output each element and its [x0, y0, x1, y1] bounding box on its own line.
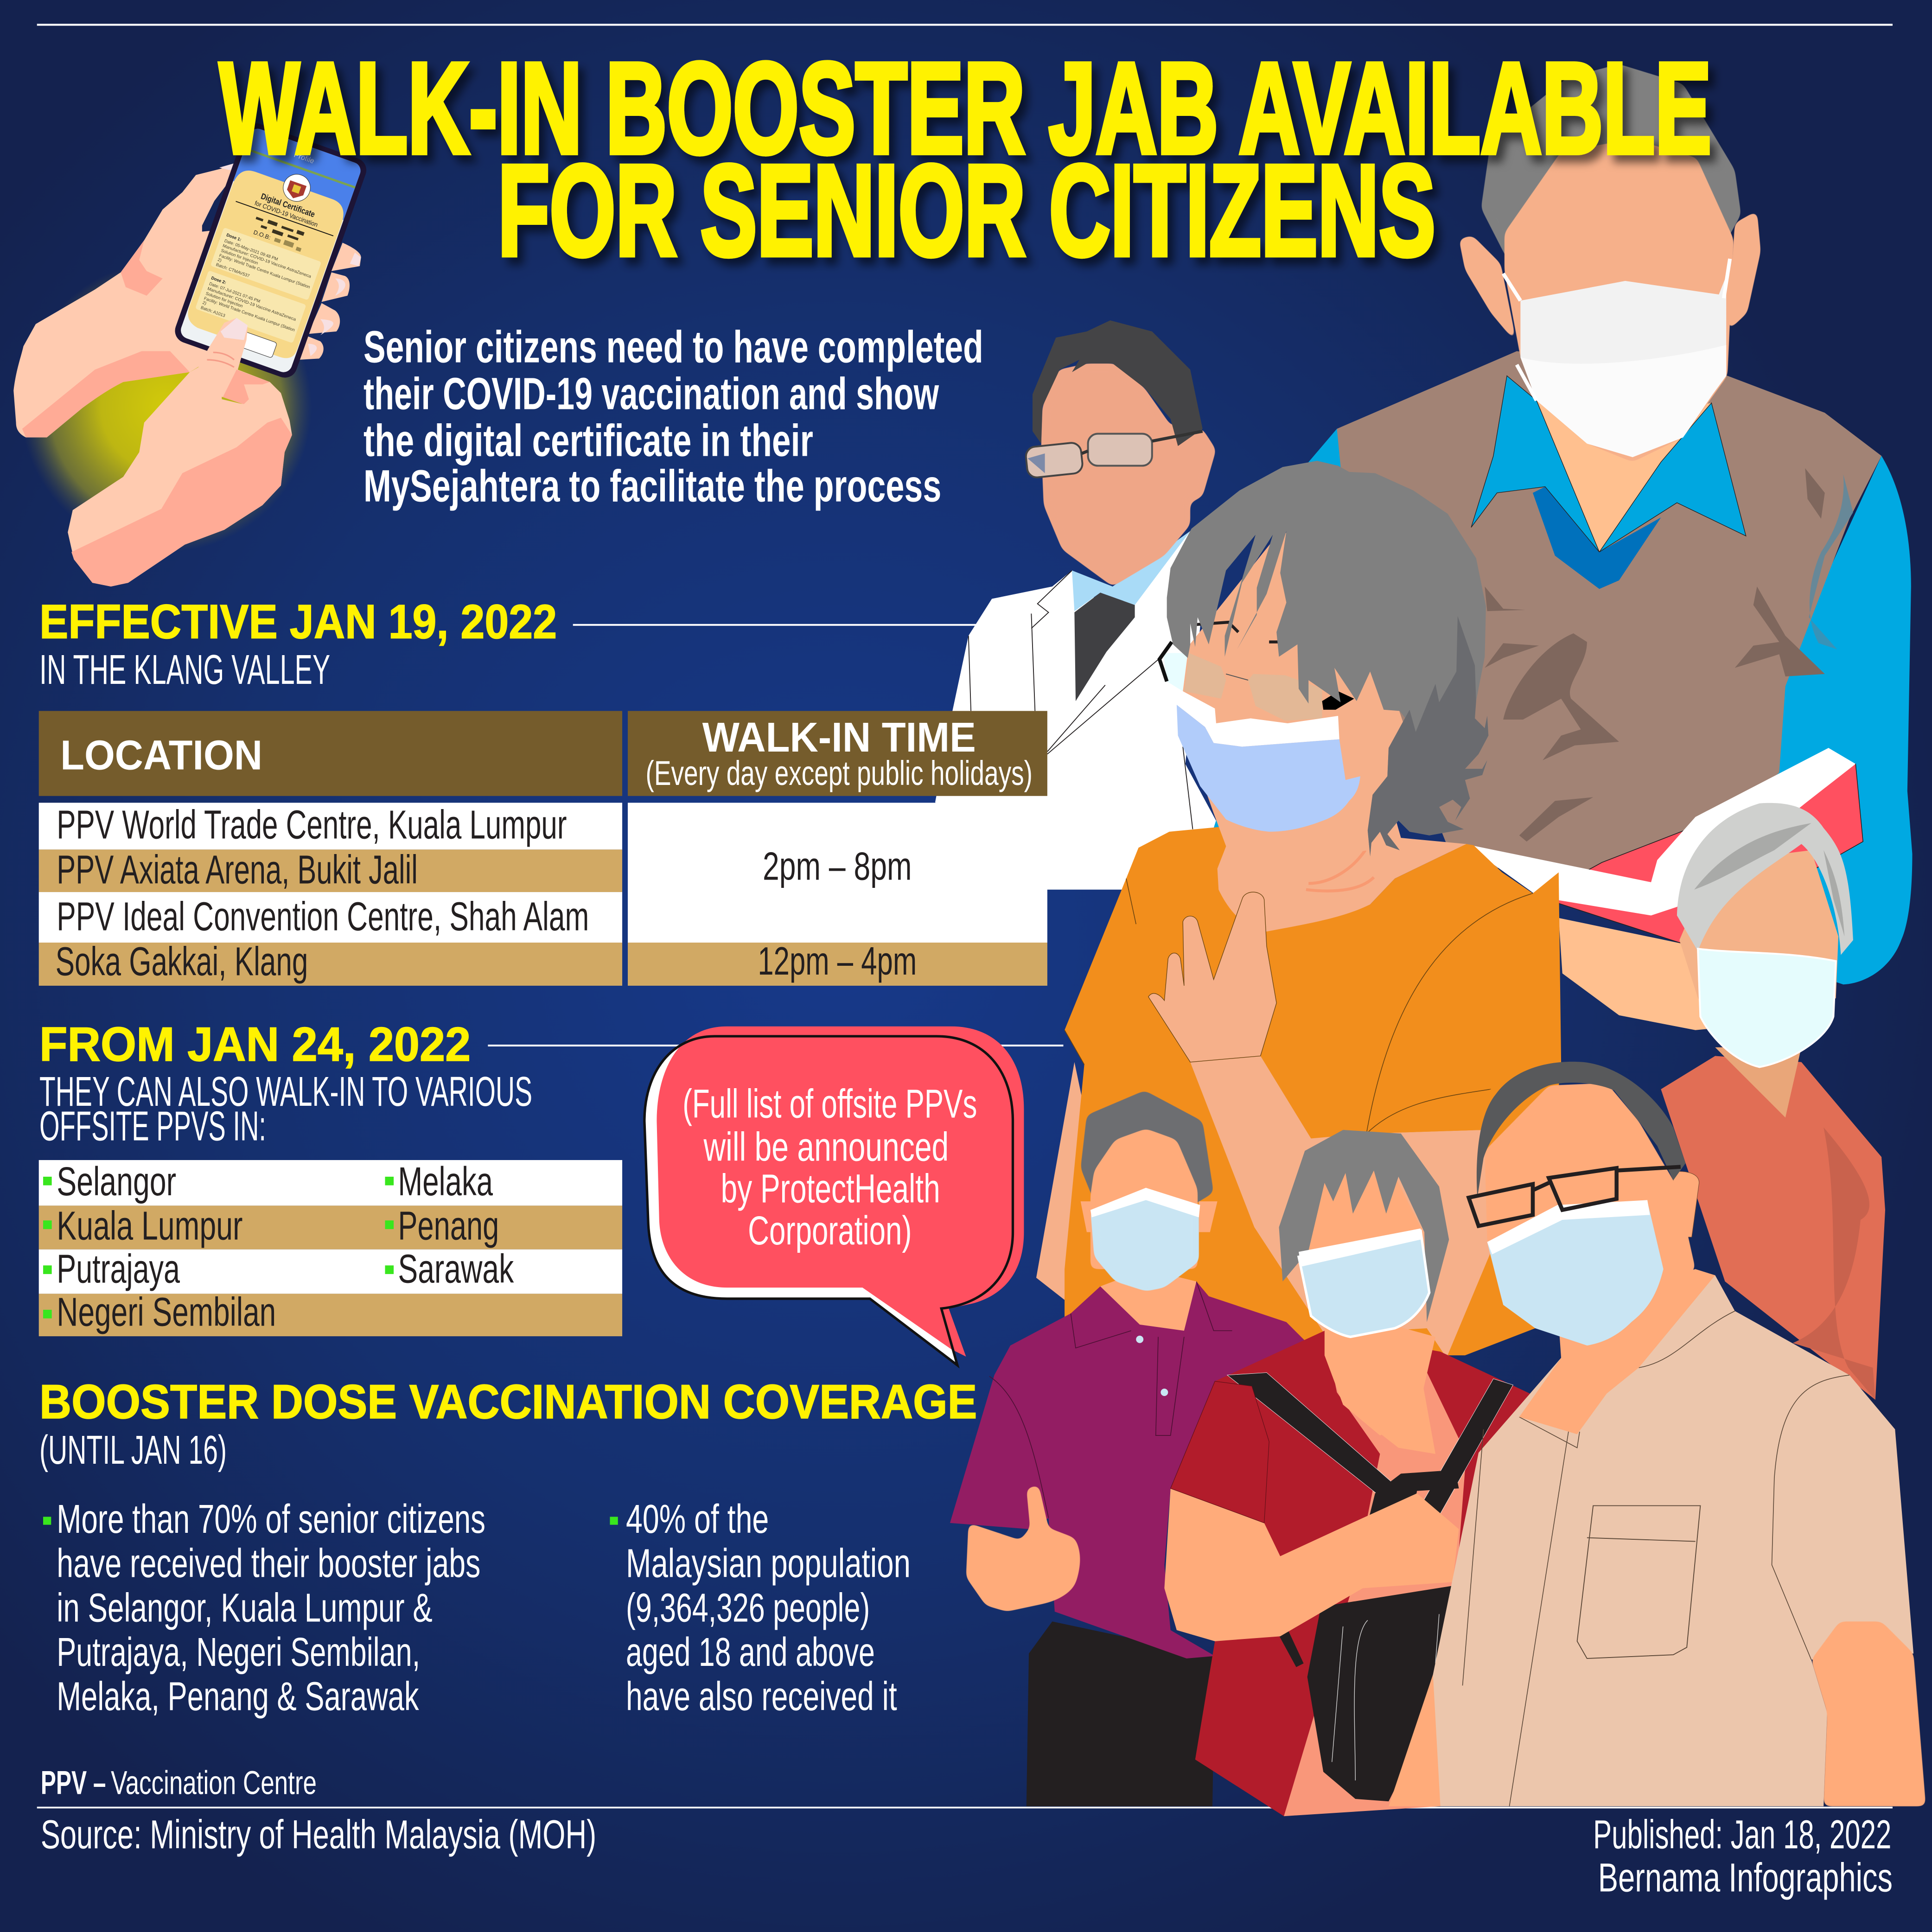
inner shirt: [1533, 487, 1661, 589]
certificate subtitle: for COVID-19 Vaccination: [254, 199, 319, 228]
row text: [56, 802, 917, 984]
hair: [1081, 1090, 1214, 1207]
hair: [1477, 1062, 1685, 1198]
glasses: [1160, 622, 1354, 721]
subheading: offsite PPVs: OFFSITE PPVS IN:: [39, 1103, 266, 1150]
fingers behind phone: [298, 243, 361, 360]
bubble text: will be announced: [703, 1124, 949, 1169]
dose 1 details: Date: 05-May-2021 09:48 PM: [224, 238, 279, 261]
footnote: PPV definition: [41, 1764, 317, 1801]
illustration: woman in orange shirt: [1036, 461, 1561, 1358]
mask band: [1299, 1229, 1421, 1267]
ears: [1081, 1201, 1218, 1232]
state names: Sarawak: [398, 1246, 514, 1291]
coverage note: population: [610, 1496, 911, 1719]
coverage note: senior citizens: Melaka, Penang & Sarawak: [57, 1674, 419, 1719]
shirt: [1661, 1056, 1885, 1400]
finger creases: [207, 352, 234, 367]
profile label: Profile: [293, 151, 315, 166]
intro paragraph: MySejahtera to facilitate the process: [363, 461, 941, 511]
emblem: [280, 171, 314, 205]
coverage note: population: have also received it: [626, 1674, 897, 1719]
right arm: [1190, 1056, 1491, 1358]
fingernails: [308, 253, 361, 356]
intro paragraph: [363, 321, 983, 511]
straps: [1227, 1372, 1513, 1527]
left forearm: [1389, 1675, 1462, 1806]
coverage note: senior citizens: in Selangor, Kuala Lumpur &: [57, 1585, 433, 1630]
illustration: woman in red jacket: [1164, 1130, 1535, 1816]
arm: [1559, 912, 1774, 1030]
table: walk-in locations and times: [39, 711, 1047, 986]
hair: [1481, 64, 1741, 259]
mask band: [1177, 691, 1339, 746]
coverage note: population: Malaysian population: [626, 1541, 911, 1586]
glasses: [1469, 1167, 1681, 1226]
pocket: [1577, 1505, 1700, 1658]
neck: [1537, 401, 1711, 552]
lower strap: [1274, 1626, 1304, 1667]
mask band: [1487, 1200, 1650, 1254]
mask: [1090, 1190, 1199, 1291]
pixelated name: [253, 216, 305, 243]
coverage note: population: aged 18 and above: [626, 1629, 875, 1675]
tie: [1074, 593, 1135, 701]
header: walk-in time: [628, 711, 1047, 796]
outline: [644, 1036, 1013, 1365]
glow: [21, 261, 312, 552]
sleeve: [1311, 1089, 1491, 1139]
title: [219, 36, 1711, 283]
shirt: [950, 1282, 1305, 1658]
face: [1679, 850, 1838, 1059]
callout: speech bubble: [644, 1027, 1024, 1365]
coverage note: senior citizens: [43, 1496, 485, 1719]
lower hand: [68, 318, 292, 587]
hand: [1148, 892, 1276, 1062]
lapel lines: [969, 570, 1192, 829]
dose 1 details: Solution for Injection: [220, 248, 259, 266]
state names: Melaka: [398, 1159, 493, 1204]
neck: [1715, 1047, 1801, 1117]
dose 2 details: Date: 07-Jul-2021 07:45 PM: [209, 281, 261, 304]
book pages: [1465, 748, 1855, 916]
sleeve: [1171, 1381, 1269, 1523]
row text: Soka Gakkai, Klang: [56, 938, 308, 984]
table: offsite states: [39, 1159, 622, 1336]
heading: effective date: EFFECTIVE JAN 19, 2022: [39, 595, 557, 649]
dose 2 details: Batch: A1013: [200, 305, 226, 318]
subheading: offsite PPVs: THEY CAN ALSO WALK-IN TO VARIOUS: [39, 1068, 532, 1115]
bubble text: [682, 1081, 977, 1253]
mask lower fold: [1520, 345, 1726, 457]
mask: [1698, 949, 1836, 1067]
row text: PPV World Trade Centre, Kuala Lumpur: [57, 802, 567, 847]
top rule: [37, 24, 1893, 26]
footnote: PPV definition: PPV –: [41, 1764, 106, 1801]
shirt shading: [1793, 1128, 1875, 1400]
mask: [1520, 276, 1726, 457]
buttons: [1136, 1336, 1168, 1396]
dose 2 details: Manufacturer: COVID-19 Vaccine AstraZeneca: [207, 286, 297, 322]
jacket: [1171, 1331, 1535, 1816]
dose 1 details: Facility: World Trade Centre Kuala Lumpur (Station: [218, 253, 311, 289]
row text: 2pm – 8pm: [763, 844, 912, 888]
download button: [228, 327, 277, 358]
shirt seams: [1462, 1311, 1849, 1806]
upper hand shading: [22, 240, 190, 437]
face: [1306, 1164, 1423, 1337]
walk-in time header text: WALK-IN TIME: [702, 714, 976, 761]
neck and chest: [1218, 764, 1466, 931]
placket and sleeve seams: [989, 1282, 1232, 1518]
right sleeve: [1700, 456, 1912, 984]
dose 1 details: Manufacturer: COVID-19 Vaccine AstraZeneca: [222, 243, 312, 279]
walk-in time note: (Every day except public holidays): [646, 754, 1033, 792]
fingernail: [221, 318, 248, 340]
location header text: LOCATION: [60, 732, 262, 779]
phone: [172, 120, 370, 381]
row text: PPV Ideal Convention Centre, Shah Alam: [57, 893, 589, 939]
vest: [1337, 351, 1881, 887]
bubble text: by ProtectHealth: [721, 1166, 940, 1211]
neck creases: [1274, 801, 1374, 891]
subheading: until date: (UNTIL JAN 16): [39, 1427, 227, 1473]
intro paragraph: their COVID-19 vaccination and show: [363, 368, 939, 419]
section rule: from: [488, 1045, 1063, 1046]
upper chest: [1325, 1331, 1435, 1454]
shirt: [1065, 826, 1561, 1355]
state names: Selangor: [57, 1159, 176, 1204]
bag handle: [1369, 1470, 1459, 1528]
hair strands: [1694, 823, 1844, 937]
location rows: [39, 803, 622, 986]
hair: [1677, 803, 1853, 955]
mask: [1299, 1231, 1429, 1337]
arm and thumbs up: [966, 1485, 1080, 1612]
dose 1 details: 2): [217, 257, 222, 263]
header: location: [39, 711, 622, 796]
hair: [1279, 1130, 1449, 1322]
dose 1 details: Dose 1:: [226, 232, 242, 242]
lower hair: [1368, 616, 1488, 856]
intro paragraph: the digital certificate in their: [363, 415, 813, 465]
chest: [1284, 1331, 1466, 1816]
subheading: Klang Valley: IN THE KLANG VALLEY: [39, 646, 330, 693]
bottom rule: [37, 1807, 1893, 1808]
lower hand shading: [71, 370, 292, 587]
section rule: effective: [573, 624, 980, 626]
left shoulder sleeve: [1214, 429, 1355, 828]
state names: Kuala Lumpur: [57, 1203, 243, 1248]
dose 2 details: 2): [202, 300, 207, 306]
bubble text: (Full list of offsite PPVs: [682, 1081, 977, 1126]
shirt: [1433, 1275, 1913, 1806]
publication info: [1593, 1811, 1893, 1900]
coverage note: population: (9,364,326 people): [626, 1585, 870, 1630]
coverage note: population: 40% of the: [626, 1496, 769, 1542]
orange below arm: [1183, 1232, 1331, 1355]
dose 2 details: Facility: World Trade Centre Kuala Lumpur (Station: [204, 296, 295, 332]
bullets: [43, 1177, 394, 1319]
vest pattern: [1485, 468, 1853, 842]
illustration: man in purple shirt: [950, 1090, 1305, 1806]
face: [1090, 1129, 1198, 1269]
bag: [1307, 1586, 1453, 1801]
mask band: [1090, 1188, 1200, 1218]
illustration: doctor: [935, 320, 1218, 890]
shirt: [1072, 531, 1190, 611]
bubble text: Corporation): [748, 1208, 912, 1253]
white backing: [644, 1036, 1013, 1365]
ear: [1673, 1172, 1699, 1237]
neck: [1325, 1306, 1435, 1435]
title line 2: FOR SENIOR CITIZENS: [498, 138, 1435, 283]
right arm: [1811, 1621, 1926, 1806]
state names: Negeri Sembilan: [57, 1289, 276, 1334]
mask: [1487, 1201, 1664, 1345]
state names: Penang: [398, 1203, 499, 1248]
illustration: senior man with vest: [1214, 64, 1912, 1030]
dose 2 details: Solution for Injection: [205, 291, 243, 308]
illustration: woman in coral shirt: [1661, 803, 1885, 1400]
bag seams: [1332, 1614, 1439, 1780]
intro paragraph: Senior citizens need to have completed: [363, 321, 983, 372]
dose 1 details: [215, 232, 318, 299]
mask straps: [1503, 259, 1730, 401]
upper hand: [13, 163, 242, 437]
face: [1183, 530, 1405, 862]
heading: coverage: BOOSTER DOSE VACCINATION COVERAGE: [39, 1375, 977, 1428]
coverage note: senior citizens: have received their booster jabs: [57, 1541, 480, 1586]
sleeve seams: [1065, 879, 1533, 1134]
dose 2 details: [200, 275, 303, 342]
illustration: man in beige shirt: [1389, 1062, 1926, 1806]
thumb nail: [219, 163, 239, 170]
face: [1485, 1083, 1696, 1343]
certificate title: Digital Certificate: [260, 191, 316, 219]
row text: PPV Axiata Arena, Bukit Jalil: [57, 847, 418, 892]
footnote: PPV definition: Vaccination Centre: [111, 1764, 317, 1801]
hair: [1033, 320, 1203, 446]
dose 1 details: Batch: CTMAV537: [215, 262, 250, 278]
coat: [935, 531, 1218, 890]
glasses: [1025, 431, 1203, 478]
coverage note: senior citizens: More than 70% of senior citizens: [57, 1496, 485, 1542]
illustration: hands holding phone: [13, 120, 370, 587]
face: [1505, 139, 1734, 462]
state names: Putrajaya: [57, 1246, 180, 1291]
red body: [657, 1027, 1024, 1357]
left arm: [1036, 1062, 1084, 1300]
arm: [1164, 1488, 1459, 1641]
neck: [1519, 1269, 1715, 1434]
collar: [1471, 376, 1746, 552]
row text: 12pm – 4pm: [758, 939, 917, 983]
state names: [57, 1159, 514, 1334]
date of birth label: D.O.B:: [253, 229, 272, 241]
face: [1041, 363, 1216, 587]
trousers: [1027, 1621, 1215, 1806]
source: Source: Ministry of Health Malaysia (MOH): [41, 1811, 596, 1857]
book cover: [1539, 764, 1863, 944]
dose 2 details: Dose 2:: [210, 275, 227, 285]
coverage note: senior citizens: Putrajaya, Negeri Sembilan,: [57, 1629, 420, 1675]
subheading: offsite PPVs: [39, 1068, 532, 1150]
heading: from date: FROM JAN 24, 2022: [39, 1017, 471, 1071]
mask: [1177, 705, 1360, 832]
time rows: [628, 803, 1047, 986]
glow sliver: [222, 397, 243, 404]
ears: [1459, 210, 1761, 344]
neck: [1100, 1269, 1196, 1331]
hair: [1167, 461, 1488, 856]
